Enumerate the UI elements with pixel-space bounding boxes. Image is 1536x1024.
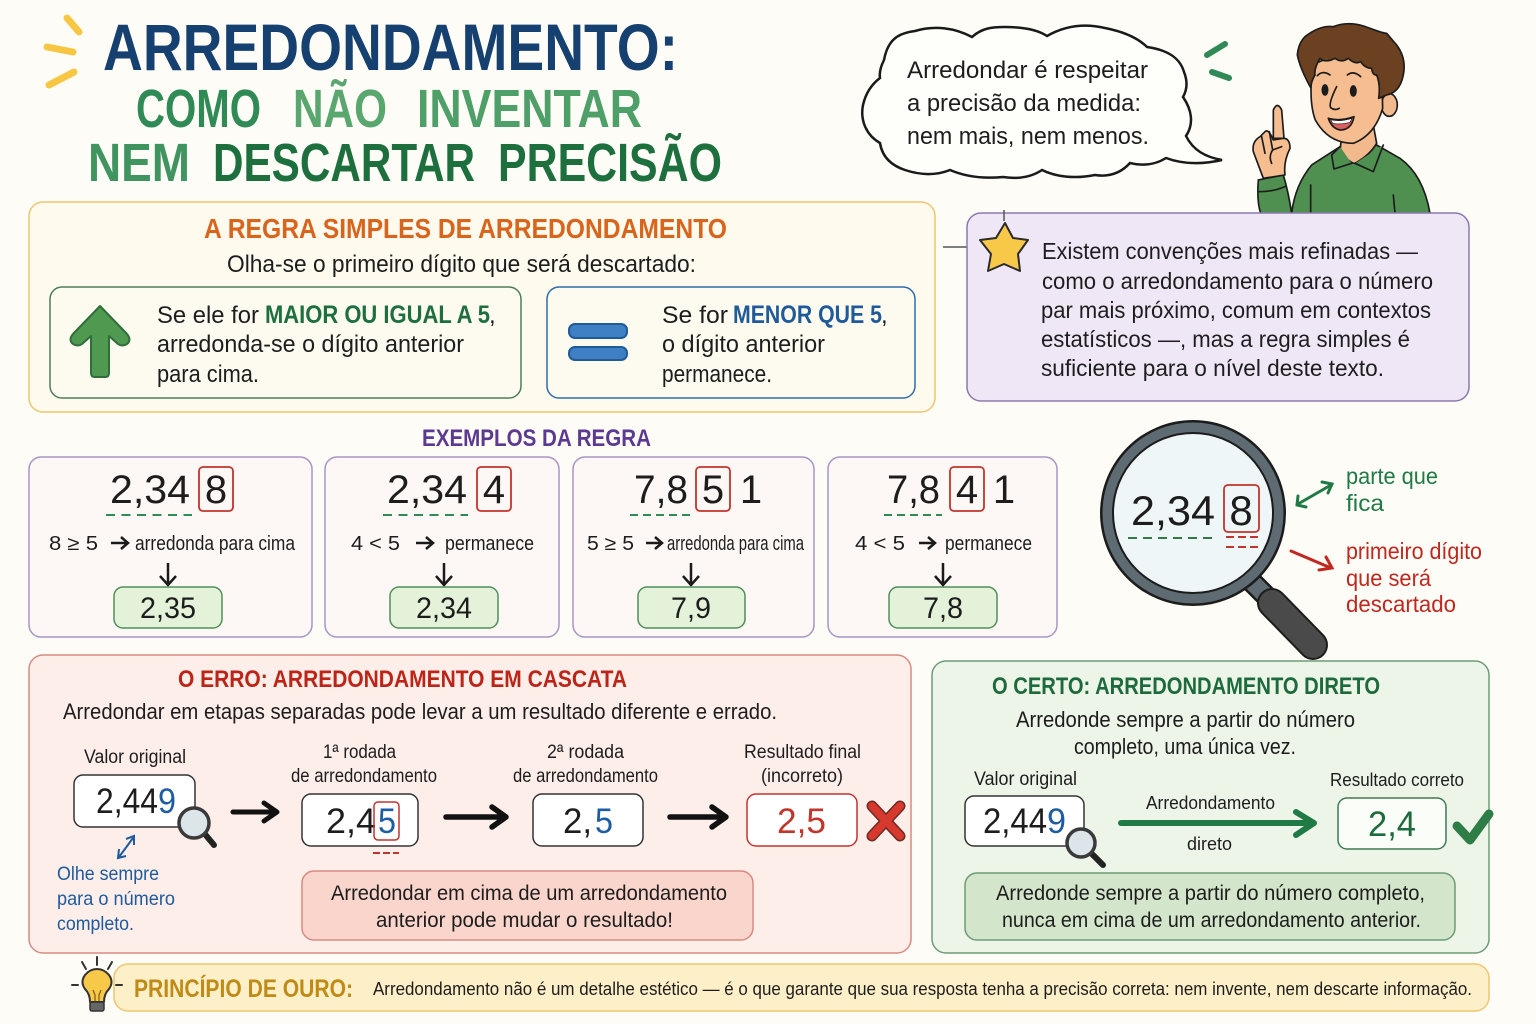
title: PRECISÃO <box>498 133 722 193</box>
label: digit to discard: que será <box>1346 565 1431 591</box>
panel: refined conventions note: estatísticos —, mas a regra simples é <box>1041 326 1410 352</box>
example card 3: 7,8 <box>634 468 688 512</box>
label: part that stays: parte que <box>1346 463 1438 489</box>
icon: equals <box>569 324 627 360</box>
title: NÃO <box>293 79 387 139</box>
example card 2 <box>325 457 559 637</box>
panel: simple rule <box>29 202 935 412</box>
panel: refined conventions note: suficiente para o nível deste texto. <box>1041 355 1384 381</box>
magnifying glass diagram <box>1100 420 1313 645</box>
icon: yellow sparks <box>47 18 79 85</box>
step: first round: 5 <box>378 802 396 841</box>
example card 3: 5 ≥ 5 <box>587 533 634 555</box>
panel: refined conventions note: par mais próximo, comum em contextos <box>1041 297 1431 323</box>
label: part that stays <box>1297 463 1438 516</box>
callout: correct rule <box>965 873 1455 940</box>
rule card: round up: Se ele for <box>157 302 259 329</box>
icon: small magnifier <box>1067 829 1103 865</box>
icon: green emphasis ticks <box>1207 44 1229 78</box>
example card 4: 7,8 <box>887 468 940 512</box>
label: digit to discard <box>1291 538 1482 617</box>
step: original value <box>965 769 1084 846</box>
example card 3 <box>573 457 814 637</box>
step: second round: de arredondamento <box>513 766 658 787</box>
example card 4: 4 <box>956 468 978 512</box>
example card 2: 2,34 <box>387 468 467 512</box>
icon: red x <box>872 806 900 836</box>
correct description: completo, uma única vez. <box>1074 734 1296 759</box>
arrow: direct rounding <box>1121 793 1314 854</box>
principle text: Arredondamento não é um detalhe estético — é o que garante que sua resposta tenha a precisão correta: nem invente, nem descarte informação. <box>373 979 1472 999</box>
step: second round: 2ª rodada <box>547 742 624 763</box>
step: first round: 2,4 <box>326 802 376 841</box>
rule card: round up <box>50 287 521 398</box>
step: original value: 9 <box>1047 802 1066 841</box>
rule card: round up: arredonda-se o dígito anterior <box>157 331 464 358</box>
arrow <box>446 807 506 827</box>
heading: error: O ERRO: ARREDONDAMENTO EM CASCATA <box>178 666 627 693</box>
heading: principle: PRINCÍPIO DE OURO: <box>134 974 353 1003</box>
example card 1: 2,35 <box>140 592 196 625</box>
example card 2: 4 <box>483 468 505 512</box>
panel: cascade error <box>29 655 911 953</box>
example card 1: 8 ≥ 5 <box>49 533 98 555</box>
callout: error warning <box>302 871 753 940</box>
example card 4: 4 < 5 <box>855 533 905 555</box>
example card 3: 5 <box>702 468 724 512</box>
title <box>88 10 722 193</box>
label: part that stays: fica <box>1346 490 1384 516</box>
rule card: stays <box>547 287 915 398</box>
step: first round: de arredondamento <box>291 766 437 787</box>
panel: refined conventions note <box>943 210 1469 401</box>
intro text: Olha-se o primeiro dígito que será descartado: <box>227 251 696 278</box>
step: original value: 2,44 <box>983 802 1047 841</box>
step: original value: Valor original <box>974 769 1077 790</box>
speech bubble: a precisão da medida: <box>907 90 1141 117</box>
step: second round: 2, <box>563 802 592 841</box>
magnifying glass diagram: 8 <box>1229 487 1253 534</box>
icon: up arrow <box>70 306 130 377</box>
label: digit to discard: descartado <box>1346 591 1456 617</box>
step: original value <box>74 747 195 827</box>
panel: golden principle <box>114 964 1489 1011</box>
rule card: stays: Se for <box>662 302 728 329</box>
rule card: round up: para cima. <box>157 361 259 388</box>
callout: correct rule: Arredonde sempre a partir do número completo, <box>996 882 1425 905</box>
rule card: stays: MENOR QUE 5 <box>733 301 882 329</box>
example card 1: 2,34 <box>110 468 190 512</box>
example card 1: arredonda para cima <box>135 533 296 555</box>
character: teacher pointing up <box>1253 24 1430 213</box>
step: correct result: Resultado correto <box>1330 770 1464 790</box>
title: DESCARTAR <box>213 133 475 193</box>
title: ARREDONDAMENTO: <box>103 10 678 84</box>
magnifying glass diagram: 2,34 <box>1131 487 1215 534</box>
callout: error warning: Arredondar em cima de um arredondamento <box>331 882 727 905</box>
heading: examples: EXEMPLOS DA REGRA <box>422 425 651 452</box>
step: original value: 2,44 <box>96 782 158 821</box>
icon: star <box>980 223 1028 271</box>
rule card: stays: , <box>881 302 888 329</box>
step: original value: 9 <box>158 782 176 821</box>
step: original value: Valor original <box>84 747 186 768</box>
rule card: round up: MAIOR OU IGUAL A 5 <box>265 301 490 329</box>
panel: refined conventions note: Existem convenções mais refinadas — <box>1042 238 1418 264</box>
step: second round: 5 <box>595 802 613 841</box>
correct description <box>1016 707 1355 759</box>
heading: correct: O CERTO: ARREDONDAMENTO DIRETO <box>992 673 1380 700</box>
label: digit to discard: primeiro dígito <box>1346 538 1482 564</box>
example card 2: 2,34 <box>416 592 472 625</box>
example card 1: 8 <box>205 468 227 512</box>
note: look at the full number: para o número <box>57 888 175 910</box>
heading: rule: A REGRA SIMPLES DE ARREDONDAMENTO <box>204 213 727 244</box>
callout: error warning: anterior pode mudar o resultado! <box>376 909 673 932</box>
rule card: stays: permanece. <box>662 361 772 388</box>
step: second round <box>513 742 658 846</box>
rule card: stays: o dígito anterior <box>662 331 825 358</box>
callout: correct rule: nunca em cima de um arredondamento anterior. <box>1002 909 1421 932</box>
example card 4: 7,8 <box>923 592 963 625</box>
rule card: round up: , <box>489 302 496 329</box>
speech bubble <box>862 26 1222 178</box>
title: INVENTAR <box>417 79 642 139</box>
step: first round <box>291 742 437 853</box>
step: correct result: 2,4 <box>1368 805 1416 844</box>
example card 3: 7,9 <box>671 592 711 625</box>
panel: refined conventions note: como o arredondamento para o número <box>1042 268 1433 294</box>
example card 2: permanece <box>445 533 534 555</box>
error description: Arredondar em etapas separadas pode levar a um resultado diferente e errado. <box>63 699 777 724</box>
note: look at the full number: Olhe sempre <box>57 863 159 885</box>
example card 1 <box>29 457 312 637</box>
correct description: Arredonde sempre a partir do número <box>1016 707 1355 732</box>
arrow <box>670 807 726 827</box>
step: incorrect result: Resultado final <box>744 742 861 763</box>
note: look at the full number: completo. <box>57 913 134 935</box>
title: COMO <box>136 79 261 139</box>
icon: light bulb <box>72 957 122 1011</box>
speech bubble: nem mais, nem menos. <box>907 123 1149 150</box>
step: correct result <box>1330 770 1464 849</box>
step: incorrect result: (incorreto) <box>761 766 843 787</box>
example card 4: permanece <box>945 533 1032 555</box>
example card 2: 4 < 5 <box>351 533 400 555</box>
icon: small magnifier <box>179 808 214 845</box>
step: first round: 1ª rodada <box>323 742 396 763</box>
example card 3: 1 <box>740 468 762 512</box>
example card 3: arredonda para cima <box>667 533 805 555</box>
step: incorrect result <box>744 742 861 846</box>
arrow: direct rounding: Arredondamento <box>1146 793 1275 813</box>
arrow <box>233 803 277 821</box>
speech bubble: Arredondar é respeitar <box>907 57 1148 84</box>
panel: correct method <box>932 661 1489 953</box>
arrow: direct rounding: direto <box>1187 834 1232 854</box>
example card 4: 1 <box>993 468 1015 512</box>
title: NEM <box>88 133 190 193</box>
step: incorrect result: 2,5 <box>777 802 826 841</box>
icon: check mark <box>1457 814 1489 840</box>
note: look at the full number <box>57 836 175 935</box>
example card 4 <box>828 457 1057 637</box>
